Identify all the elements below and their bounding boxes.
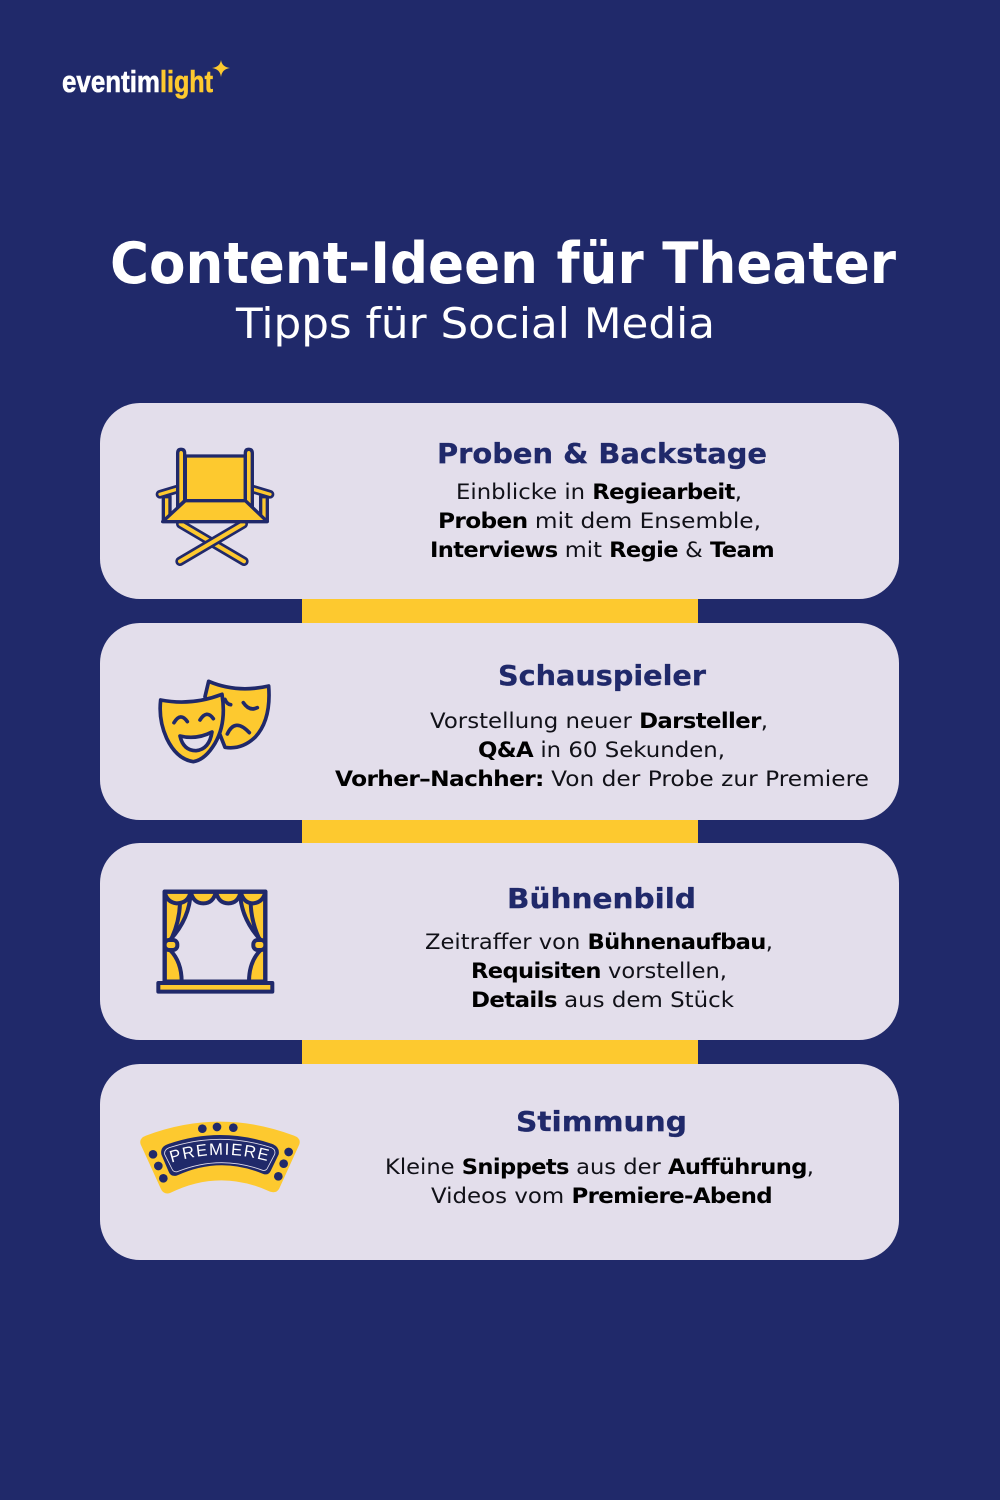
icon: premiere marquee: PREMIERE xyxy=(170,1143,269,1162)
heading: Schauspieler xyxy=(498,659,706,692)
heading: Proben & Backstage xyxy=(437,437,767,470)
text block: Interviews mit Regie & Team xyxy=(430,538,774,563)
panel: Proben & Backstage xyxy=(100,403,899,599)
text block: Kleine Snippets aus der Aufführung , xyxy=(385,1155,814,1180)
heading: Bühnenbild xyxy=(507,882,696,915)
panel: Stimmung xyxy=(100,1064,899,1260)
text block xyxy=(425,930,773,1013)
text block: Zeitraffer von Bühnenaufbau , xyxy=(425,930,773,955)
logo: eventimlight: eventim xyxy=(62,64,160,99)
text block xyxy=(385,1155,814,1209)
text block: Vorher–Nachher: Von der Probe zur Premiere xyxy=(335,767,869,792)
icon: theater masks xyxy=(160,681,269,762)
panel: Bühnenbild xyxy=(100,843,899,1040)
text block: Videos vom Premiere-Abend xyxy=(431,1184,772,1209)
icon: director chair xyxy=(160,449,270,561)
title: Content-Ideen für Theater xyxy=(110,231,896,297)
text block: Vorstellung neuer Darsteller , xyxy=(430,709,768,734)
text block: Q&A in 60 Sekunden, xyxy=(478,738,725,763)
icon: premiere marquee xyxy=(140,1122,300,1194)
connector bars xyxy=(302,595,698,1068)
text block: Einblicke in Regiearbeit , xyxy=(456,480,742,505)
subtitle: Tipps für Social Media xyxy=(235,299,715,348)
text block: Proben mit dem Ensemble, xyxy=(438,509,761,534)
logo: eventimlight: light xyxy=(160,64,213,99)
heading: Stimmung xyxy=(516,1105,687,1138)
icon: stage curtain xyxy=(158,892,272,992)
text block xyxy=(430,480,774,563)
text block: Requisiten vorstellen, xyxy=(471,959,727,984)
panel: Schauspieler xyxy=(100,623,899,820)
text block xyxy=(335,709,869,792)
text block: Details aus dem Stück xyxy=(471,988,735,1013)
logo: eventimlight xyxy=(62,60,230,99)
